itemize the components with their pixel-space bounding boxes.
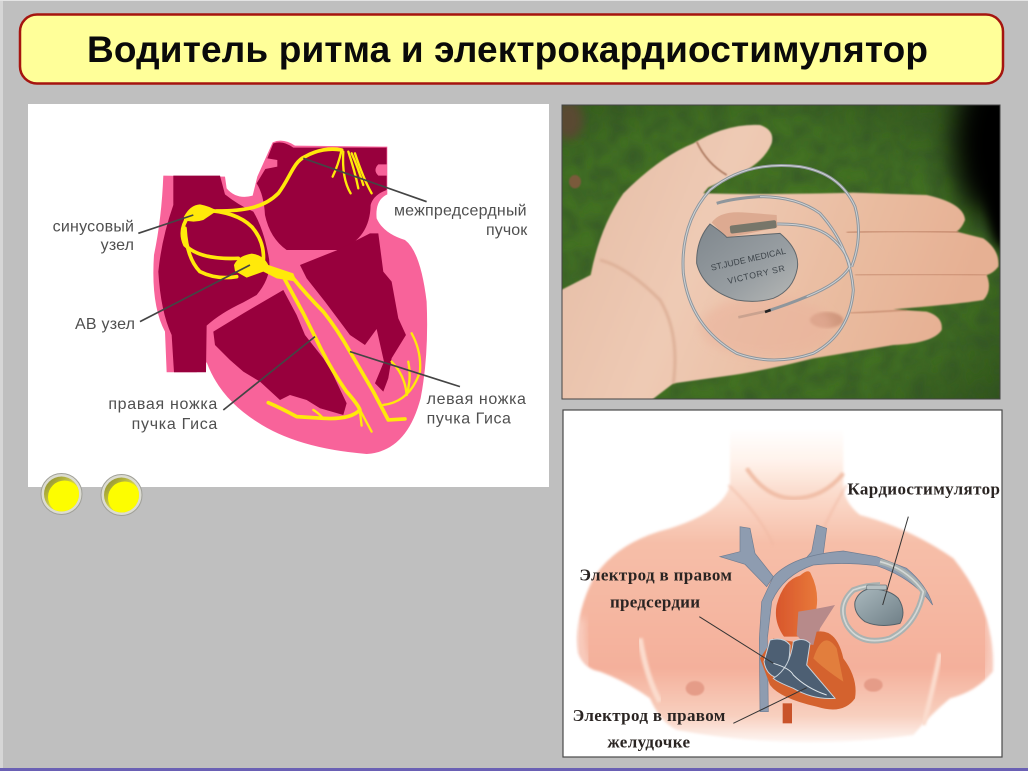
panel: photo of pacemaker on a hand: [553, 67, 1028, 405]
title: [20, 14, 1003, 84]
label: sinus node: синусовый: [53, 219, 134, 236]
heart: [760, 571, 856, 723]
hand: [560, 125, 998, 400]
leader lines: [699, 517, 908, 723]
title: Водитель ритма и электрокардиостимулятор: [87, 29, 928, 70]
bundle branches: [268, 277, 420, 432]
label: pacemaker: Кардиостимулятор: [847, 479, 1000, 498]
label: left bundle branch: левая ножка: [427, 391, 526, 408]
panel: heart conduction diagram: [28, 104, 549, 487]
label: interatrial bundle: пучок: [486, 222, 528, 239]
label: right bundle branch: правая ножка: [108, 396, 217, 413]
pacemaker device and lead coil: [843, 562, 923, 641]
heart muscle outline: [153, 141, 427, 454]
pacemaker device: ST.JUDE MEDICAL: [710, 246, 787, 273]
right atrium chamber: [158, 176, 269, 372]
left atrium chamber: [257, 142, 387, 250]
pacemaker lead wire coils: [683, 165, 858, 360]
torso: [577, 428, 993, 742]
label: ventricular electrode: желудочке: [607, 733, 690, 752]
interatrial conduction bundle: [217, 149, 372, 211]
panel: chest illustration with pacemaker: [563, 410, 1002, 757]
grass background: [553, 67, 1028, 405]
label: left bundle branch: пучка Гиса: [427, 410, 511, 427]
label: interatrial bundle: межпредсердный: [394, 203, 527, 220]
navigation button right: [101, 474, 142, 516]
label: right bundle branch: пучка Гиса: [132, 416, 217, 433]
label: atrial electrode: Электрод в правом: [579, 566, 732, 585]
veins: [720, 525, 933, 712]
leader lines: [138, 158, 460, 410]
left ventricle chamber: [300, 233, 406, 392]
label: sinus node: узел: [101, 237, 134, 254]
sinus node and AV node pathways: [182, 204, 297, 282]
label: AV node: АВ узел: [75, 316, 135, 333]
pacemaker device: [697, 212, 798, 301]
navigation button left: [41, 474, 82, 514]
label: atrial electrode: предсердии: [610, 592, 700, 611]
label: ventricular electrode: Электрод в правом: [573, 706, 726, 725]
right ventricle chamber: [213, 290, 347, 415]
pacemaker device: VICTORY SR: [727, 263, 786, 286]
